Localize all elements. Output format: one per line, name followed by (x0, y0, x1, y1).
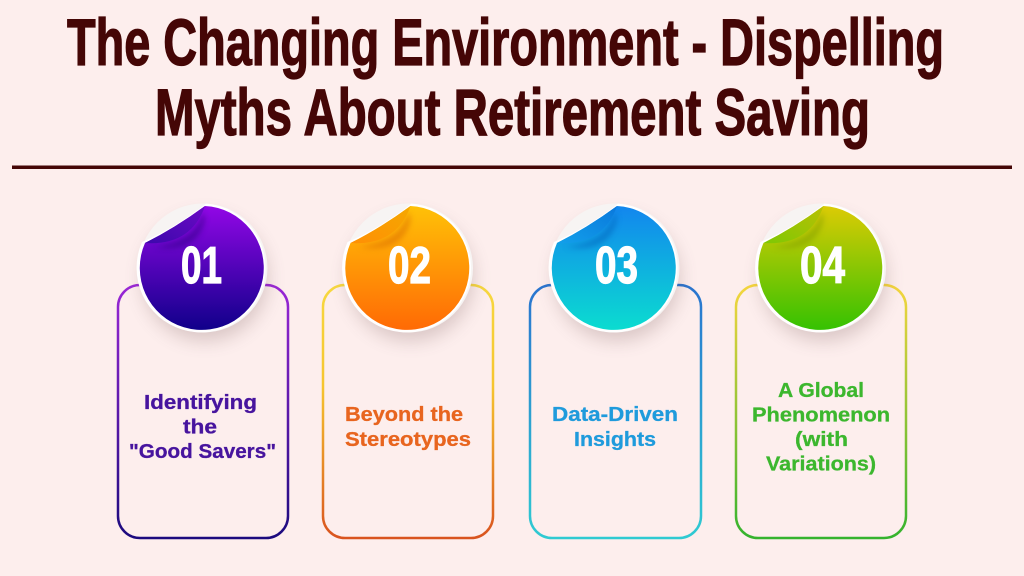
sticker badge 01: 01 (181, 237, 222, 295)
sticker badge 04 (755, 204, 886, 341)
card 3 label: Insights (574, 429, 656, 451)
card 1 label: the (183, 416, 217, 438)
sticker badge 03 (549, 204, 680, 341)
sticker badge 02 (342, 204, 474, 341)
card 3 outline (530, 285, 701, 538)
sticker badge 02: 02 (388, 237, 431, 295)
card 2 outline (323, 285, 493, 538)
card 4 label (752, 380, 890, 476)
sticker badge 01 (137, 204, 268, 341)
title (67, 5, 944, 149)
card 2 label: Beyond the (345, 404, 463, 426)
card 4 label: Phenomenon (752, 404, 890, 426)
card 1 label: "Good Savers" (129, 441, 276, 463)
card 4 outline (736, 285, 906, 538)
card 3 label (552, 404, 678, 451)
card 3 label: Data-Driven (552, 404, 678, 426)
title divider rule (12, 166, 1012, 169)
card 4 label: Variations) (766, 454, 876, 476)
card 4 label: (with (795, 429, 848, 451)
card 2 label: Stereotypes (345, 429, 471, 451)
card 4 label: A Global (778, 380, 864, 402)
card 2 label (345, 404, 471, 451)
card 1 outline (118, 285, 288, 538)
card 1 label (129, 392, 276, 463)
card 1 label: Identifying (144, 392, 257, 414)
sticker badge 04: 04 (800, 237, 845, 295)
sticker badge 03: 03 (595, 237, 638, 295)
